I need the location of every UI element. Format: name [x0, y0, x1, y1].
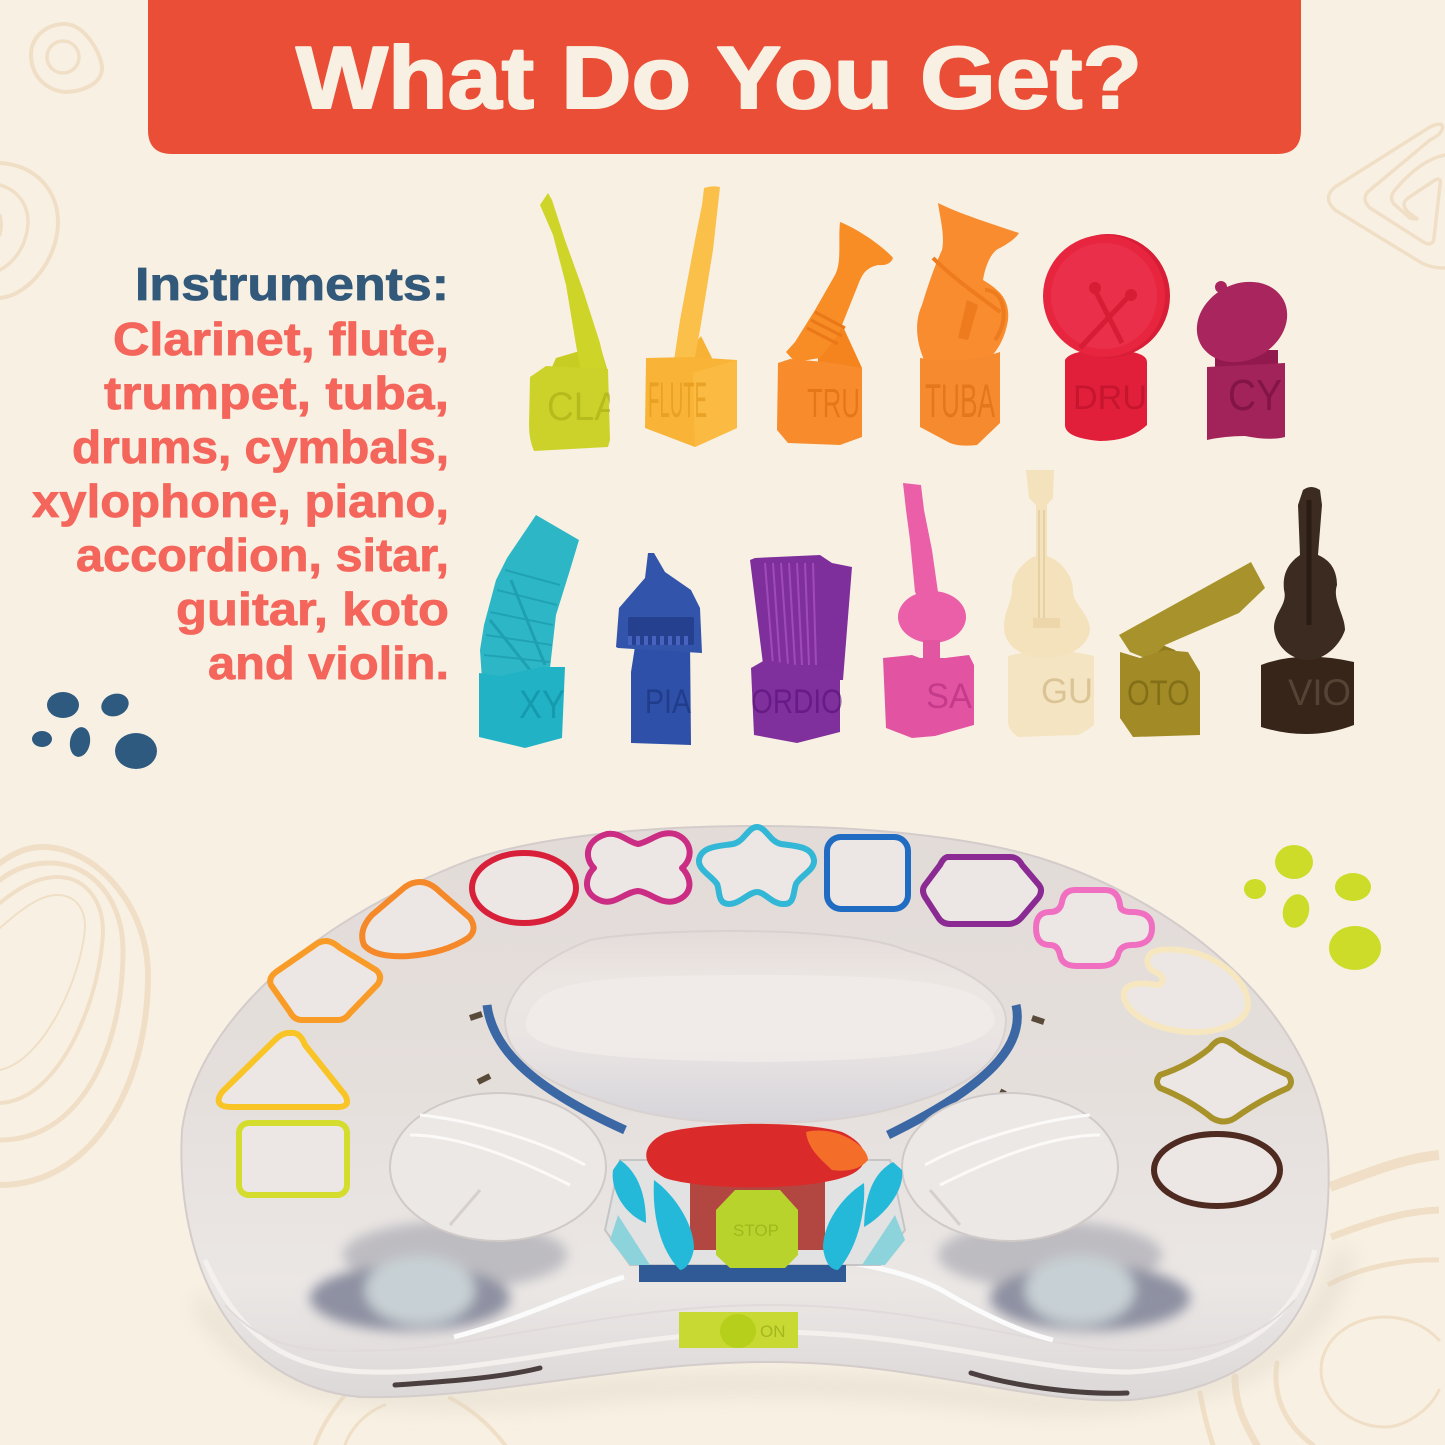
base unit: transparent tray: [181, 826, 1345, 1403]
instrument: piano: PIA: [645, 683, 691, 721]
heading: instruments: Instruments:: [135, 258, 449, 310]
instrument: tuba: TUBA: [925, 374, 995, 427]
speaker domes: [390, 1093, 1118, 1241]
circuit board: [470, 1005, 1044, 1135]
power switch: ON: [760, 1322, 786, 1341]
instrument: guitar: [1004, 470, 1094, 737]
slot: olive diamond: [1157, 1040, 1291, 1122]
instrument: flute: FLUTE: [648, 372, 707, 428]
slot: orange pentagon: [270, 941, 380, 1020]
text block: instruments list: trumpet, tuba,: [104, 367, 449, 419]
decoration: navy dots: [32, 690, 157, 769]
instrument: cymbals: [1183, 266, 1301, 440]
instrument: violin: [1261, 487, 1354, 734]
slot: cream palette: [1124, 949, 1248, 1032]
text block: instruments list: [32, 258, 449, 689]
text block: instruments list: drums, cymbals,: [72, 421, 449, 473]
instrument: sitar: SA: [926, 677, 973, 716]
speakers: [310, 1221, 1190, 1331]
instrument: drum: [1043, 234, 1170, 441]
instrument: trumpet: [777, 222, 893, 445]
title: What Do You Get?: [296, 28, 1142, 127]
dark bottom marks: [395, 1368, 1127, 1393]
instrument: drum: DRU: [1073, 379, 1147, 417]
instrument: piano: [616, 553, 702, 745]
instrument: accordion: [750, 555, 852, 743]
slot: red circle: [472, 853, 576, 923]
title banner: [148, 0, 1301, 154]
stop button: [716, 1190, 798, 1268]
text block: instruments list: xylophone, piano,: [32, 475, 449, 527]
instrument: flute: [645, 186, 737, 447]
right cyan buttons: [823, 1183, 864, 1270]
instrument: trumpet: TRU: [807, 380, 860, 426]
rim highlight: [205, 1250, 1315, 1372]
inner window: [505, 931, 1006, 1123]
slot: magenta cross: [587, 833, 690, 902]
slot: blue rectangle: [827, 837, 908, 909]
slot: yellow square: [239, 1123, 347, 1195]
text block: instruments list: guitar, koto: [176, 583, 449, 635]
slot: cyan star: [699, 827, 814, 904]
instrument: tuba: [917, 203, 1019, 446]
power switch: [679, 1312, 798, 1348]
slot: orange arch: [362, 882, 474, 956]
instrument: clarinet: [529, 193, 610, 451]
instrument: sitar: [883, 483, 974, 738]
play button: [646, 1124, 865, 1187]
instrument: koto: OTO: [1127, 674, 1190, 713]
slots: [219, 827, 1291, 1206]
slot: purple hexagon: [923, 857, 1041, 924]
controls: buttons: STOP: [733, 1221, 779, 1240]
instrument: cymbals: CY: [1228, 371, 1282, 420]
instrument: koto: [1119, 562, 1265, 737]
instrument: guitar: GU: [1041, 672, 1093, 711]
text block: instruments list: Clarinet, flute,: [113, 313, 449, 365]
instrument: clarinet: CLA: [547, 385, 619, 429]
controls: buttons: [605, 1124, 905, 1282]
text block: instruments list: and violin.: [208, 637, 449, 689]
text block: instruments list: accordion, sitar,: [76, 529, 449, 581]
instrument: violin: VIO: [1288, 672, 1351, 713]
slot: pink cross: [1036, 890, 1152, 966]
instrument: xylophone: [479, 515, 579, 748]
slot: brown circle: [1154, 1134, 1280, 1206]
instrument: accordion: ORDIO: [751, 683, 843, 721]
decoration: lime dots: [1244, 845, 1381, 970]
slot: yellow triangle: [219, 1033, 347, 1107]
shadow: [200, 1250, 1345, 1403]
wires: [454, 1255, 1053, 1340]
left cyan buttons: [613, 1160, 646, 1223]
instrument: xylophone: XY: [519, 683, 565, 727]
